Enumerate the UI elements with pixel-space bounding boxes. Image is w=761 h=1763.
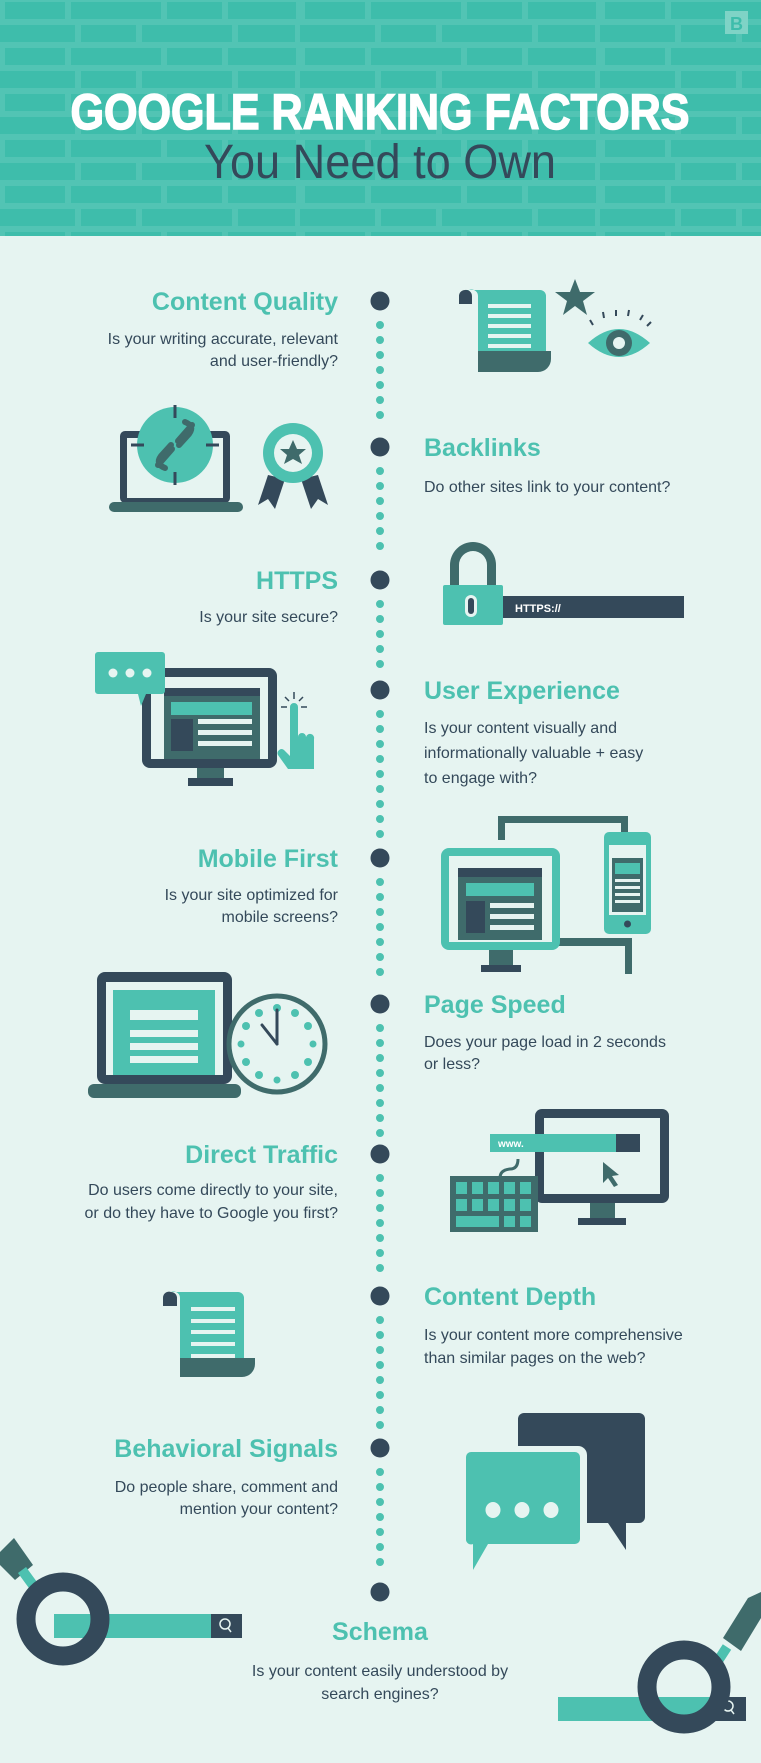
- item: Mobile First: mobile screens?: [222, 909, 338, 926]
- icon: laptop with clock: [88, 972, 325, 1098]
- icon: laptop with link and award badge: [109, 405, 328, 512]
- item: Content Depth: Content Depth: [424, 1283, 596, 1311]
- icon: monitor with chat bubble and hand: [95, 652, 314, 786]
- item: Backlinks: Backlinks: [424, 434, 541, 462]
- item: Direct Traffic: Direct Traffic: [185, 1141, 338, 1169]
- item: User Experience: User Experience: [424, 677, 620, 705]
- icon: responsive monitor and phone: [441, 816, 651, 974]
- timeline: [370, 292, 390, 1602]
- subtitle: You Need to Own: [204, 136, 556, 189]
- item: Page Speed: or less?: [424, 1056, 480, 1073]
- item: Content Depth: [424, 1283, 683, 1367]
- item: Schema: search engines?: [321, 1686, 439, 1703]
- item: Mobile First: [165, 845, 339, 926]
- item: Behavioral Signals: Behavioral Signals: [114, 1435, 338, 1463]
- item: Schema: [252, 1618, 508, 1703]
- item: Content Quality: [108, 288, 339, 370]
- item: Behavioral Signals: [114, 1435, 338, 1518]
- item: Backlinks: Do other sites link to your content?: [424, 479, 670, 496]
- item: Direct Traffic: or do they have to Google you first?: [85, 1205, 338, 1222]
- header banner: [0, 0, 761, 236]
- logo badge: [725, 11, 748, 34]
- icon: scroll, star and eye: [459, 279, 651, 372]
- item: Behavioral Signals: mention your content?: [180, 1501, 338, 1518]
- item: HTTPS: [199, 567, 338, 626]
- item: Direct Traffic: [85, 1141, 338, 1222]
- icon: monitor, url bar and keyboard: www.: [497, 1139, 524, 1150]
- item: Content Quality: and user-friendly?: [210, 353, 338, 370]
- icon: monitor, url bar and keyboard: [450, 1109, 669, 1232]
- item: Mobile First: Mobile First: [198, 845, 339, 873]
- item: User Experience: informationally valuable + easy: [424, 745, 643, 762]
- icon: padlock with https bar: HTTPS://: [515, 603, 561, 615]
- item: Page Speed: [424, 991, 666, 1073]
- item: HTTPS: Is your site secure?: [199, 609, 338, 626]
- item: Schema: Is your content easily understood by: [252, 1663, 508, 1680]
- item: HTTPS: HTTPS: [256, 567, 338, 595]
- item: User Experience: [424, 677, 643, 787]
- icon: chat bubbles: [463, 1413, 645, 1570]
- icon: right magnifier with search bar: [558, 1592, 761, 1724]
- item: Schema: Schema: [332, 1618, 429, 1646]
- logo badge: B: [730, 14, 743, 34]
- item: Content Depth: Is your content more comprehensive: [424, 1327, 683, 1344]
- item: User Experience: to engage with?: [424, 770, 537, 787]
- icon: padlock with https bar: [443, 542, 684, 625]
- icon: left magnifier with search bar: [0, 1538, 242, 1656]
- item: Behavioral Signals: Do people share, comment and: [115, 1479, 338, 1496]
- item: Content Quality: Content Quality: [152, 288, 338, 316]
- item: Page Speed: Does your page load in 2 seconds: [424, 1034, 666, 1051]
- item: Content Depth: than similar pages on the web?: [424, 1350, 646, 1367]
- item: User Experience: Is your content visually and: [424, 720, 617, 737]
- item: Mobile First: Is your site optimized for: [165, 887, 339, 904]
- item: Page Speed: Page Speed: [424, 991, 566, 1019]
- icon: scroll document: [163, 1292, 255, 1377]
- item: Backlinks: [424, 434, 670, 496]
- item: Content Quality: Is your writing accurate, relevant: [108, 331, 339, 348]
- item: Direct Traffic: Do users come directly to your site,: [88, 1182, 338, 1199]
